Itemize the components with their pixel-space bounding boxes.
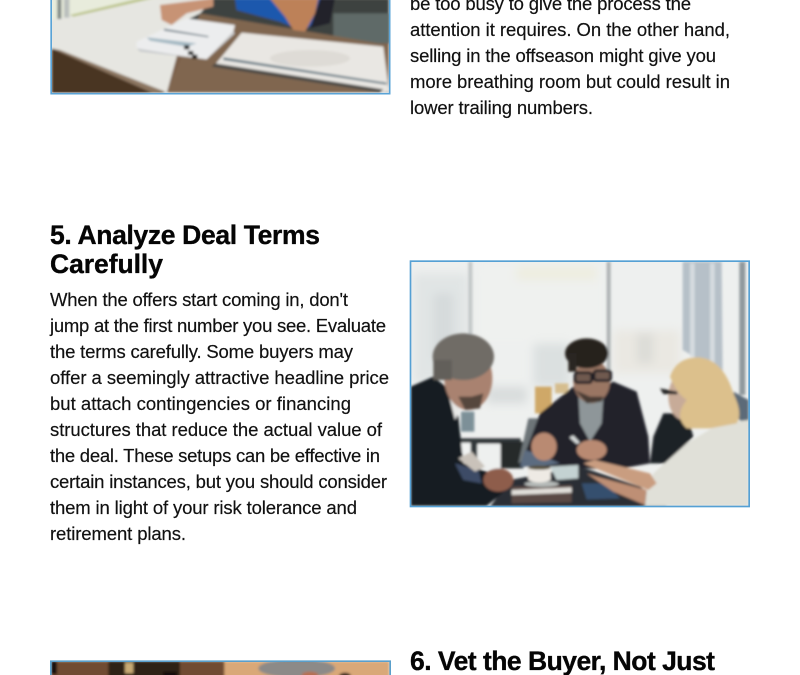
woman — [645, 420, 749, 506]
text block: section 5 body: retirement plans. — [50, 523, 186, 544]
text block: section 5 body: certain instances, but you should consider — [50, 471, 387, 492]
text block: timing the sale continued — [410, 0, 730, 118]
text block: section 5 body — [49, 289, 389, 544]
heading: section 5 — [50, 220, 320, 279]
left man — [411, 377, 513, 506]
text block: section 5 body: structures that reduce the actual value of — [50, 419, 383, 440]
text block: section 5 body: jump at the first number you see. Evaluate — [49, 315, 386, 336]
center man — [520, 382, 650, 470]
photo: three people in a meeting — [410, 261, 749, 507]
text block: timing the sale continued: selling in the offseason might give you — [410, 45, 716, 66]
text block: timing the sale continued: attention it requires. On the other hand, — [410, 19, 730, 40]
text block: section 5 body: the deal. These setups can be effective in — [50, 445, 380, 466]
photo border — [51, 0, 390, 94]
text block: section 5 body: but attach contingencies or financing — [50, 393, 351, 414]
table — [490, 467, 667, 507]
text block: timing the sale continued: lower trailing numbers. — [410, 97, 593, 118]
photo: hands and documents on desk — [51, 0, 390, 94]
text block: section 5 body: offer a seemingly attractive headline price — [50, 367, 389, 388]
heading: section 5: Carefully — [50, 249, 163, 279]
photo border — [410, 261, 749, 506]
text block: section 5 body: the terms carefully. Some buyers may — [50, 341, 354, 362]
text block: timing the sale continued: more breathing room but could result in — [410, 71, 730, 92]
text block: section 5 body: When the offers start coming in, don't — [50, 289, 348, 310]
text block: section 5 body: them in light of your risk tolerance and — [50, 497, 357, 518]
photo: top of next image — [51, 659, 390, 675]
heading: section 5: 5. Analyze Deal Terms — [50, 220, 320, 250]
photo border — [51, 661, 390, 675]
